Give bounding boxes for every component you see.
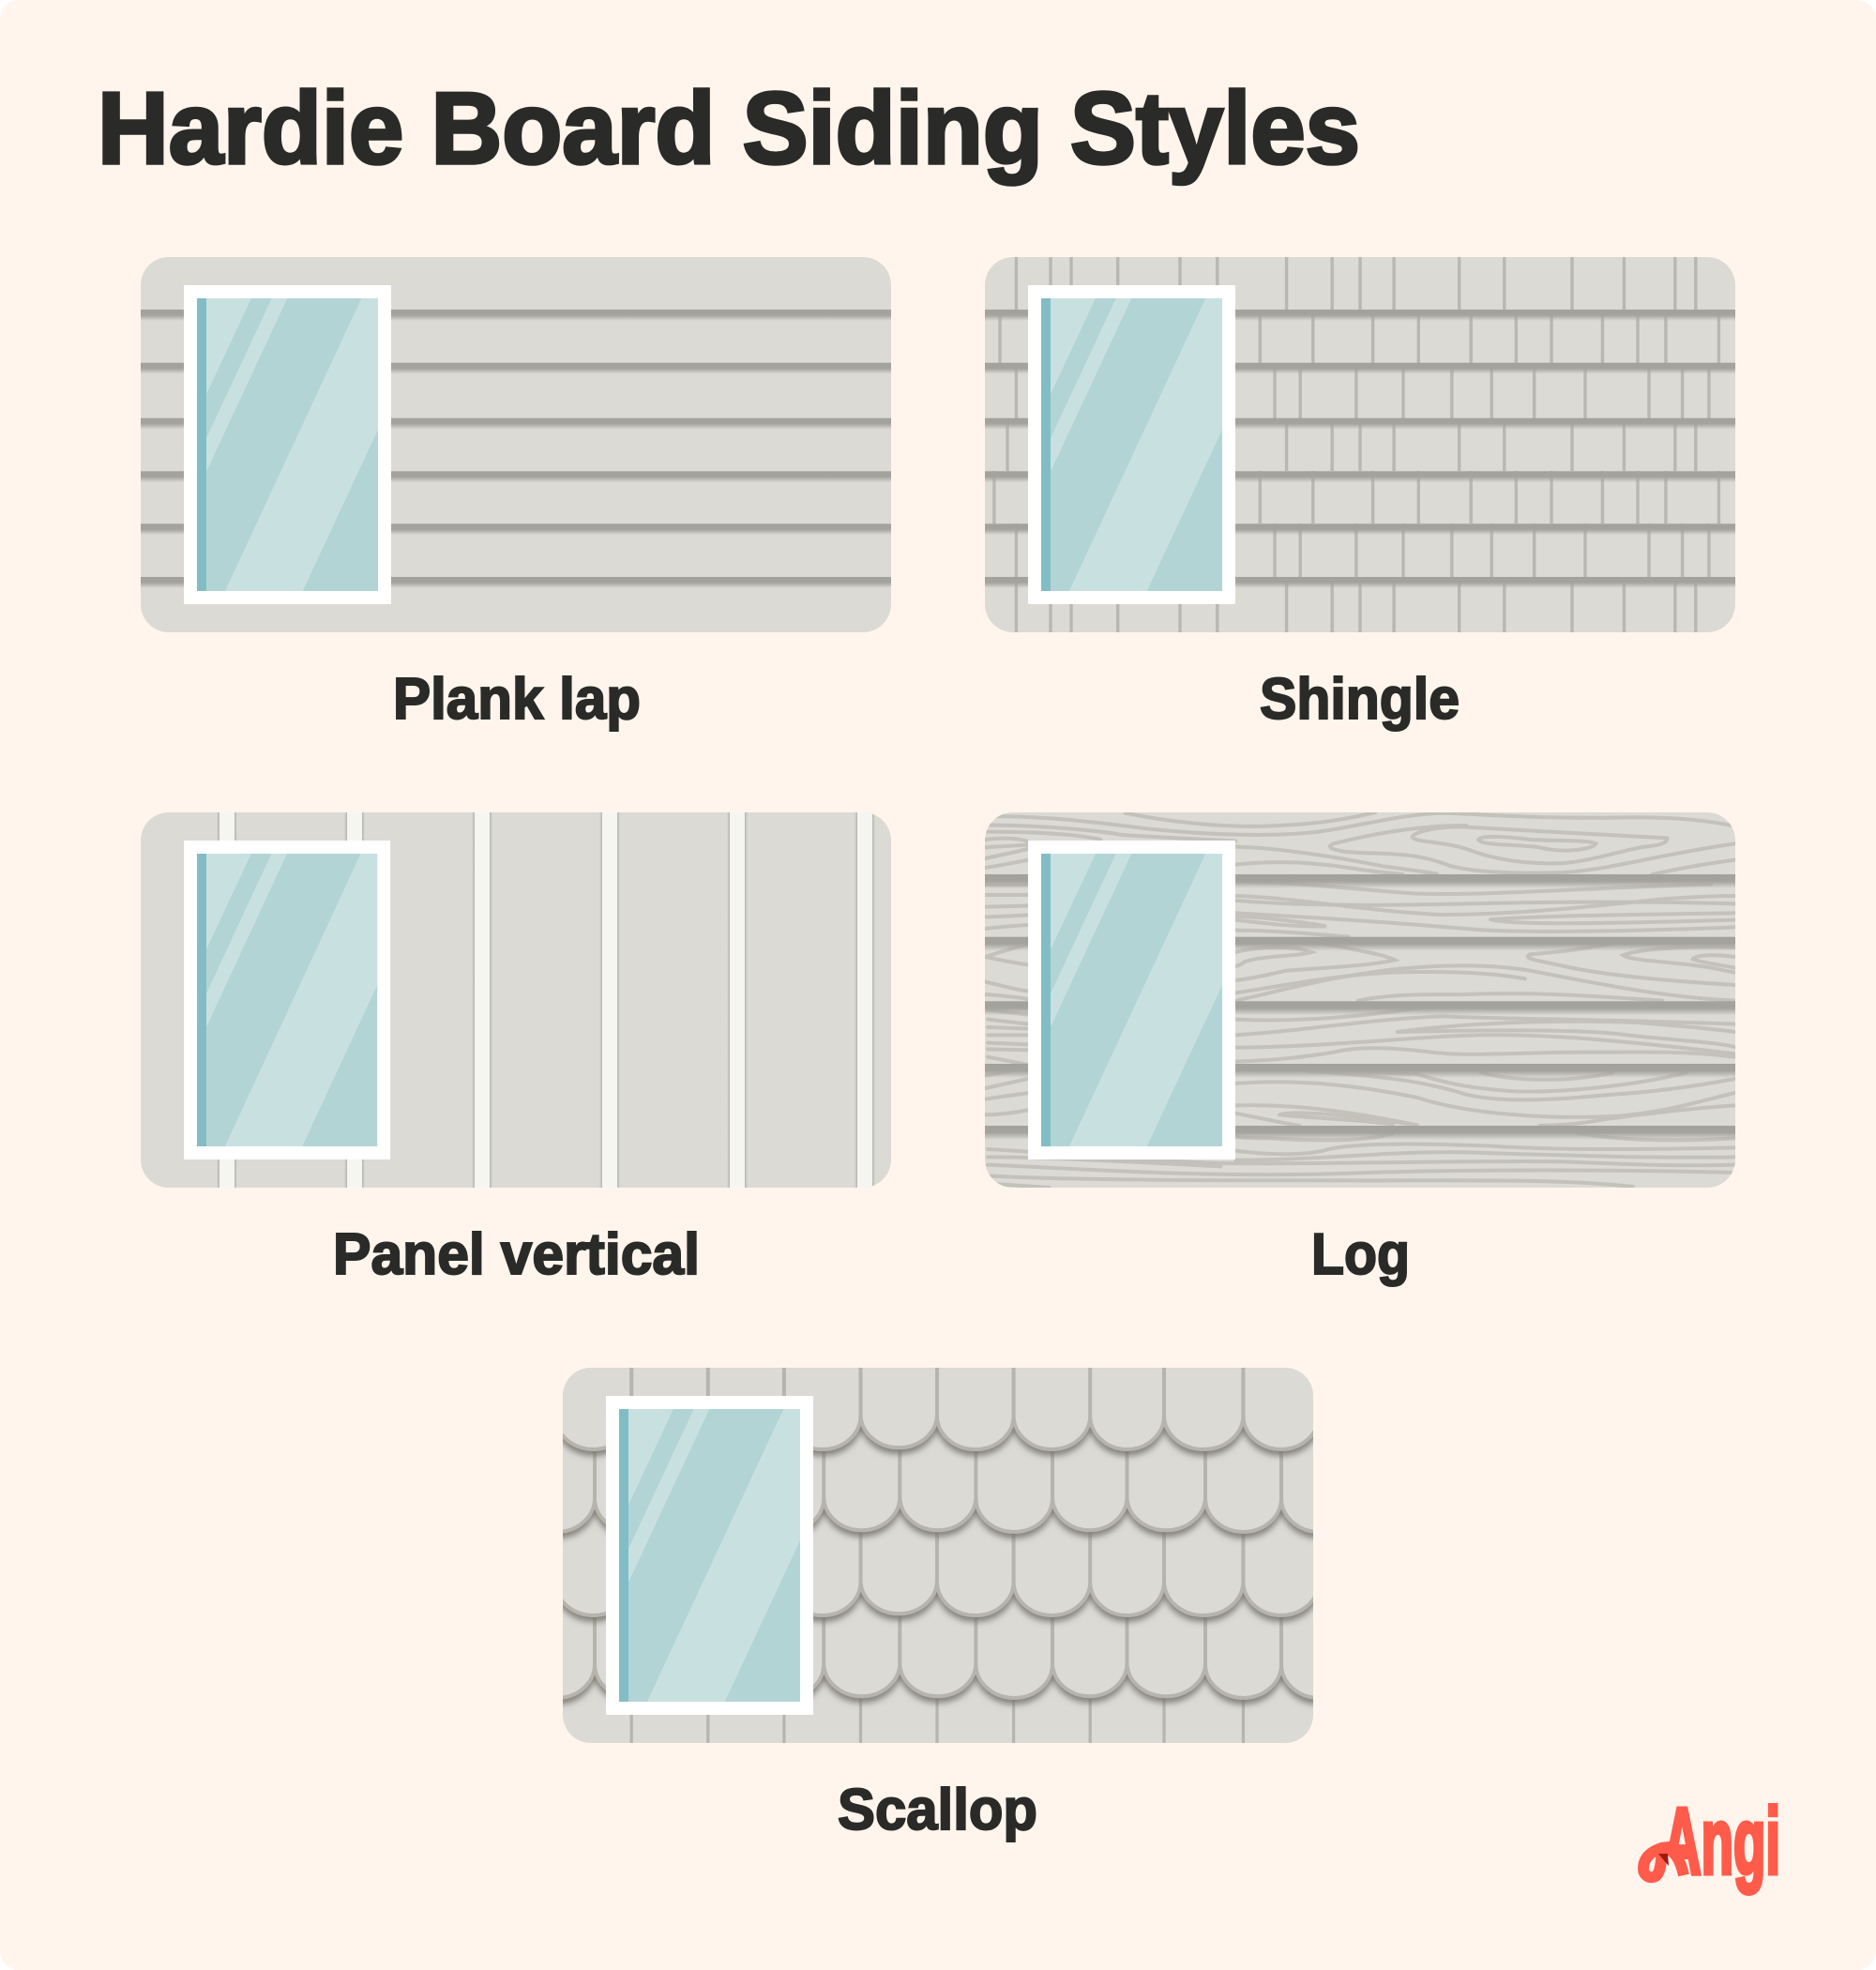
panel: log bbox=[985, 812, 1735, 1188]
icon: window bbox=[184, 841, 390, 1159]
panel: plank lap bbox=[141, 257, 891, 632]
icon: window bbox=[1028, 841, 1235, 1159]
title: Hardie Board Siding Styles bbox=[98, 71, 1360, 186]
panel: panel vertical bbox=[141, 812, 891, 1188]
logo: Angi bbox=[1643, 1789, 1780, 1894]
logo: Angi: Angi bbox=[1663, 1789, 1780, 1894]
label: shingle: Shingle bbox=[1260, 667, 1460, 732]
label: panel vertical: Panel vertical bbox=[333, 1222, 700, 1287]
vertical panel siding texture bbox=[141, 812, 891, 1188]
log siding texture bbox=[985, 812, 1735, 1188]
label: scallop: Scallop bbox=[838, 1778, 1037, 1842]
label: plank lap: Plank lap bbox=[393, 667, 641, 732]
shingle siding texture bbox=[985, 257, 1735, 632]
icon: window bbox=[1028, 285, 1235, 604]
icon: window bbox=[184, 285, 391, 604]
panel: scallop bbox=[563, 1368, 1313, 1743]
scallop siding texture bbox=[563, 1368, 1313, 1743]
label: log: Log bbox=[1311, 1222, 1410, 1287]
icon: window bbox=[606, 1396, 813, 1715]
plank lap siding texture bbox=[141, 257, 891, 632]
panel: shingle bbox=[985, 257, 1735, 632]
